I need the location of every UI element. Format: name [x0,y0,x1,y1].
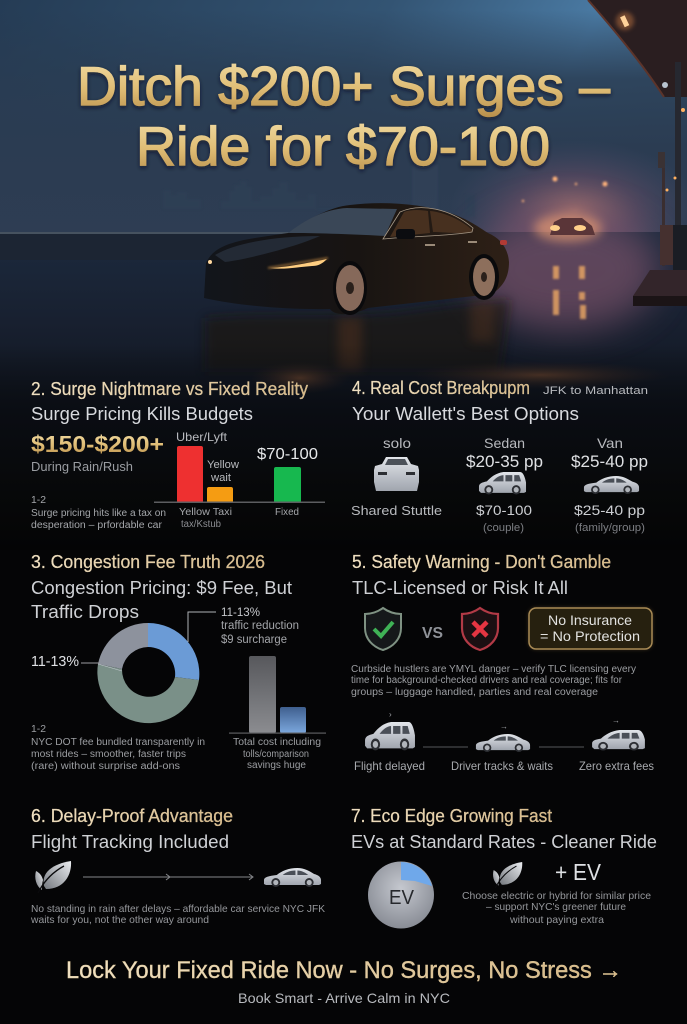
warning callout box [529,608,652,649]
big price: $150-$200+ [31,431,164,457]
body text: without paying extra [509,914,604,926]
street lights [522,176,608,202]
column: van: $25-40 pp [571,452,648,471]
car reflection [205,300,510,372]
donut labels: traffic reduction [221,620,299,632]
bar chart [154,430,325,530]
panel: surge nightmare [31,379,325,531]
cost bar chart [229,656,326,771]
donut labels: 11-13% [31,653,79,670]
flow: delayed to waiting: → [500,722,508,731]
call to action: Lock Your Fixed Ride Now - No Surges, No Stress → [66,957,622,984]
flow: delayed to waiting: › [389,710,392,719]
body text [30,903,325,926]
icon: leaf [493,862,522,888]
cost bar chart: tolls/comparison [243,749,309,760]
cost bar chart: savings huge [247,760,306,771]
fade to black [0,345,687,411]
title: Ditch $200+ Surges – [77,55,610,117]
icon: car [264,868,321,887]
hero: rainy night scene [0,0,687,412]
body text: Curbside hustlers are YMYL danger – verify TLC licensing every [351,664,636,675]
subheading: EVs at Standard Rates - Cleaner Ride [351,832,657,852]
subheading: Your Wallett's Best Options [352,404,579,424]
body text: waits for you, not the other way around [30,914,209,926]
icon: green shield [365,608,401,650]
warning callout box: No Insurance [548,612,632,628]
subheading: TLC-Licensed or Risk It All [352,577,568,598]
road glow and wet reflections [470,210,660,330]
column: sedan [466,435,543,534]
body text: Surge pricing hits like a tax on [31,508,166,519]
body text: 1-2 [31,495,46,506]
arrow flow [83,874,253,880]
distant car with tail lights [534,214,602,242]
column: sedan: $70-100 [476,502,532,518]
body text: 1-2 [31,724,46,735]
heading: 6. Delay-Proof Advantage [31,806,233,826]
heading: 5. Safety Warning - Don't Gamble [352,552,611,572]
pie chart: EV [389,887,415,909]
heading: 7. Eco Edge Growing Fast [351,806,552,826]
body text: desperation – prfordable car [31,520,163,531]
flow: delayed to waiting [354,710,654,773]
donut chart [97,623,199,723]
donut labels: $9 surcharge [221,634,287,646]
column: sedan: $20-35 pp [466,452,543,471]
column: van [571,435,648,534]
flow: delayed to waiting: Zero extra fees [579,759,654,773]
black sedan [204,203,509,315]
panel: real cost breakdown [351,378,648,534]
subheading: Surge Pricing Kills Budgets [31,404,253,424]
bar chart: Fixed [275,506,299,518]
column: solo: solo [383,435,411,451]
heading: 3. Congestion Fee Truth 2026 [31,552,265,572]
column: van: Van [597,435,623,451]
body text [462,890,651,926]
canopy awning [588,0,687,97]
body text [31,724,205,772]
flow: delayed to waiting: → [612,716,620,725]
pie chart [368,862,434,928]
title: Ride for $70-100 [136,115,550,177]
body text: most rides – smoother, faster trips [31,749,186,760]
bar chart: tax/Kstub [181,519,221,530]
bar chart: Uber/Lyft [176,430,228,444]
body text: – support NYC's greener future [486,901,626,913]
body text: No standing in rain after delays – affordable car service NYC JFK [31,903,325,915]
body text [31,495,166,531]
body text: NYC DOT fee bundled transparently in [31,737,205,748]
column: sedan: Sedan [484,435,525,451]
city skyline [163,165,475,217]
tagline: Book Smart - Arrive Calm in NYC [238,990,450,1006]
column: van: (family/group) [575,522,645,534]
donut labels: 11-13% [221,607,260,619]
body text: groups – luggage handled, parties and real coverage [351,687,598,698]
bar chart: Yellow Taxi [179,506,232,518]
panel: congestion fee: Traffic Drops [31,601,139,622]
donut labels [31,607,299,670]
bar chart: Yellow [207,459,239,471]
panel: congestion fee [31,552,326,772]
flow: delayed to waiting: Driver tracks & waits [451,759,553,773]
title [77,55,610,177]
plus EV label: + EV [555,859,602,885]
flow: delayed to waiting: Flight delayed [354,759,425,773]
column: solo [351,435,442,518]
body text [351,664,636,698]
bar chart: wait [210,472,231,484]
body text: (rare) without surprise add-ons [31,761,180,772]
price note: During Rain/Rush [31,459,133,474]
column: solo: Shared Stuttle [351,503,442,518]
icon: leaf [35,861,71,893]
column: sedan: (couple) [483,522,524,534]
panel: safety warning [351,552,654,773]
sea wall [0,233,290,260]
panel: delay-proof advantage [30,806,325,926]
panel: eco edge [351,806,657,928]
cost bar chart: Total cost including [233,737,321,748]
column: van: $25-40 pp [574,502,645,518]
warning callout box: = No Protection [540,628,640,644]
body text: Choose electric or hybrid for similar price [462,890,651,902]
heading: 4. Real Cost Breakpupm [352,378,530,398]
route label: JFK to Manhattan [543,385,648,397]
subheading: Congestion Pricing: $9 Fee, But [31,577,292,598]
heading: 2. Surge Nightmare vs Fixed Reality [31,379,308,399]
icon: red shield [462,608,498,650]
bar chart: $70-100 [257,446,318,463]
subheading: Flight Tracking Included [31,832,229,852]
vs label: VS [422,625,443,642]
curb-side posts [633,62,687,306]
body text: time for background-checked drivers and real coverage; fits for [351,675,623,686]
